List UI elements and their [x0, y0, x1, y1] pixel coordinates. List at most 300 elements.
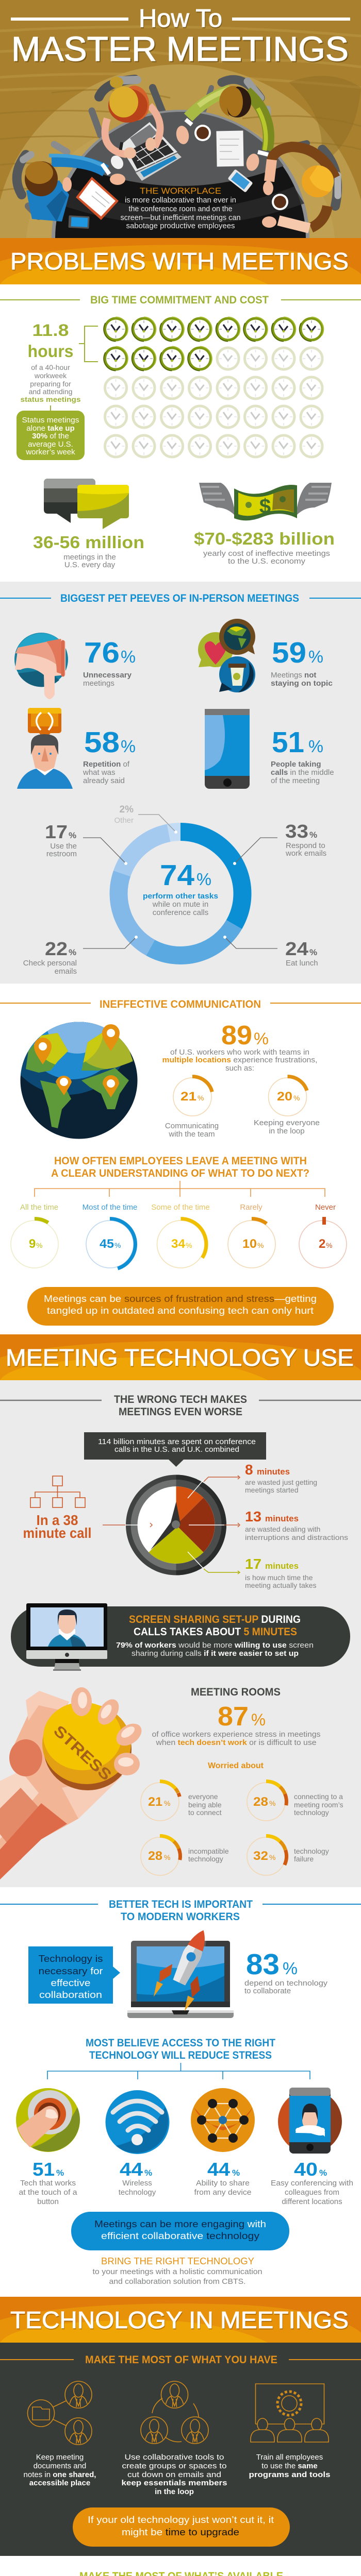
label: 33% work emails: work emails: [285, 849, 326, 858]
stat: 36-56 million meetings: [33, 533, 144, 569]
panel: screen sharing: [11, 1603, 350, 1671]
icon: chat bubbles: [44, 479, 129, 529]
label: 22% personal emails: emails: [55, 967, 77, 976]
icon: laptop with rocket: [127, 1921, 234, 2018]
label: 2% other: Other: [114, 816, 134, 825]
illustration: person in brown with orange hair: [262, 147, 335, 228]
stat: 44% share from any device: [194, 2159, 252, 2197]
ring stat: never 2%: %: [326, 1241, 332, 1249]
panel: make the most of what you have: [0, 2343, 361, 2556]
stat: 8 minutes: 8: [245, 1462, 253, 1478]
stat: 40% easy conferencing: different locations: [282, 2197, 342, 2206]
tip: shared place: accessible place: [29, 2479, 90, 2487]
stat: 11.8 hours: [21, 321, 81, 403]
stat: 58% repetition: [83, 726, 136, 785]
heading: how often employees leave: HOW OFTEN EMPLOYEES LEAVE A MEETING WITH: [54, 1155, 307, 1167]
ring stat: 32% technology failure: [237, 1827, 329, 1885]
stat: 11.8 hours: status meetings: [21, 395, 81, 403]
label: 17% restroom: [45, 821, 77, 858]
stat: 40% easy conferencing: [271, 2159, 353, 2206]
stat: 83% depend on technology: depend on technology: [244, 1979, 328, 1988]
icon: off-topic speech bubbles: [198, 619, 255, 692]
icon: training presentation: [251, 2384, 329, 2442]
screen sharing text: sharing during calls if it were easier to set up: [132, 1649, 299, 1658]
clock grid: 12 of 40 hours: [104, 317, 323, 457]
stat: 17 minutes: is how much time the: [245, 1573, 313, 1582]
ring stat: rarely 10%: 10: [242, 1237, 257, 1251]
ring stat: 21% everyone connect: %: [164, 1799, 170, 1807]
illustration: mouse: [110, 156, 124, 169]
illustration: woman in red with yellow hair: [105, 77, 160, 159]
ring stat: 32% technology failure: technology: [294, 1847, 329, 1855]
bracket connecting stat to clocks: [51, 326, 98, 411]
stat: 11.8 hours: workweek: [34, 371, 67, 380]
donut center text: 74% perform other tasks: perform other tasks: [143, 892, 218, 901]
illustration: man in blue: [25, 156, 125, 222]
stat: 51% taking calls: of the meeting: [271, 776, 320, 785]
ring stat: 28% incompatible: technology: [188, 1855, 223, 1863]
ring stat: 21% everyone connect: to connect: [188, 1808, 222, 1817]
ring stat: rarely 10%: Rarely: [240, 1203, 262, 1212]
workplace intro text: screen—but inefficient meetings can: [121, 214, 240, 222]
section heading: wrong tech: THE WRONG TECH MAKES: [114, 1394, 247, 1405]
tip: collaborative tools: keep essentials members: [122, 2479, 227, 2487]
stat: 76% unnecessary meetings: %: [121, 647, 136, 666]
callout pill: frustration and stress: tangled up in outdated and confusing tech can only hurt: [47, 1306, 314, 1316]
stat: 59% not staying on topic: %: [308, 647, 323, 666]
ring stat: 20% keeping in the loop: in the loop: [269, 1127, 305, 1136]
tip: shared place: Keep meeting: [36, 2453, 84, 2462]
stat: 76% unnecessary meetings: 76: [84, 636, 120, 669]
stat: 83% depend on technology: 83: [246, 1948, 280, 1981]
ring stat: 28% incompatible: incompatible: [188, 1847, 229, 1855]
label: in a 38 minute call: [23, 1512, 92, 1541]
workplace intro text: the conference room and on the: [129, 205, 232, 213]
text: bring the right technology: BRING THE RIGHT TECHNOLOGY: [101, 2256, 254, 2266]
section heading: better tech: [0, 1899, 361, 1923]
stat: 51% taking calls: calls in the middle: [271, 768, 334, 777]
illustration: chairs: [17, 79, 338, 216]
illustration: smartphone: [227, 169, 253, 193]
icon: monitor with person: [26, 1603, 107, 1671]
stat: 83% depend on technology: to collaborate: [244, 1987, 291, 1995]
stat: 36-56 million meetings: U.S. every day: [64, 561, 116, 569]
heading: how often employees leave: [51, 1155, 309, 1179]
icon: man with repeat speech bubble: [17, 708, 73, 789]
stat: 59% not staying on topic: [271, 636, 333, 688]
stat: 40% easy conferencing: colleagues from: [285, 2188, 339, 2197]
stat: 8 minutes: are wasted just getting: [245, 1478, 317, 1486]
callout: status meetings 30%: worker’s week: [25, 448, 75, 456]
workplace intro text: sabotage productive employees: [126, 222, 235, 230]
stat: yearly cost: $70-$283 billion: [194, 529, 335, 548]
icon: video call phone: [278, 2088, 342, 2154]
label: 17% restroom: 17: [45, 821, 68, 842]
title: Master Meetings: MASTER MEETINGS: [11, 30, 349, 69]
stat: 89% multiple locations: [162, 1021, 318, 1073]
text: bring the right technology: [93, 2256, 262, 2286]
ring stat: 21% everyone connect: [131, 1773, 222, 1831]
wood table background: [0, 0, 361, 238]
ring stat: some of the time 34%: %: [186, 1241, 192, 1249]
clock pie: 38 minute call: [126, 1475, 226, 1575]
callout pill: time to upgrade: If your old technology just won’t cut it, it: [88, 2515, 274, 2525]
callout: status meetings 30%: 30% of the: [32, 432, 69, 440]
callout: technology is necessary: effective: [51, 1978, 91, 1988]
ring stat: 21% communicating: Communicating: [165, 1122, 219, 1130]
ring stat: some of the time 34%: Some of the time: [151, 1203, 210, 1212]
stat: 44% share from any device: %: [232, 2168, 240, 2178]
stat: 87% stress: %: [251, 1710, 266, 1729]
ring stat: all the time 9%: 9: [29, 1237, 36, 1251]
heading: most believe access: TECHNOLOGY WILL REDUCE STRESS: [89, 2049, 272, 2061]
stat: 17 minutes: meeting actually takes: [245, 1581, 317, 1589]
ring stat: rarely 10%: %: [257, 1241, 264, 1249]
stat: 51% tech at touch of button: 51: [32, 2159, 55, 2180]
stat: 51% tech at touch of button: [19, 2159, 77, 2206]
illustration: laptop: [120, 122, 182, 181]
section heading: wrong tech: [0, 1394, 361, 1418]
stat: 8 minutes: minutes: [257, 1467, 290, 1477]
icon: collaboration loop: [141, 2381, 208, 2444]
banner: meeting technology use: [0, 1334, 361, 1380]
label: 24% eat lunch: %: [309, 947, 317, 957]
ring stat: 28% connecting to room: connecting to a: [294, 1792, 343, 1801]
stat: 83% depend on technology: [244, 1948, 328, 1995]
workplace intro text: is more collaborative than ever in: [125, 196, 236, 205]
stat: 11.8 hours: preparing for: [30, 380, 71, 388]
ring stat: 21% communicating: [165, 1077, 219, 1139]
illustration: clipboard: [76, 177, 119, 220]
stat: 76% unnecessary meetings: [83, 636, 136, 688]
callout pill: more engaging: [71, 2212, 289, 2250]
tip: same programs: [249, 2453, 330, 2479]
label: 22% personal emails: 22: [45, 938, 68, 959]
heading: most believe access: MOST BELIEVE ACCESS TO THE RIGHT: [86, 2037, 275, 2049]
label: 2% other: 2%: [120, 804, 134, 815]
stat: yearly cost: [194, 529, 335, 566]
donut center text: 74% perform other tasks: 74: [160, 859, 194, 892]
stat: 11.8 hours: and attending: [29, 387, 72, 396]
stat: yearly cost: yearly cost of ineffective meetings: [203, 549, 330, 558]
stat: 51% taking calls: [271, 726, 334, 785]
illustration: paper: [216, 131, 244, 166]
icon: thumbs down: [14, 633, 68, 699]
illustration: coffee cups: [194, 125, 288, 210]
stat: 8 minutes: [245, 1462, 317, 1494]
ring stat: 21% communicating: %: [198, 1094, 204, 1102]
stat: 76% unnecessary meetings: Unnecessary: [83, 671, 132, 680]
icon: shared folder: [28, 2381, 92, 2445]
stat: 89% multiple locations: 89: [221, 1021, 252, 1050]
illustration: hand squeezing stress ball: [0, 1687, 145, 1879]
callout: technology is necessary: Technology is: [38, 1954, 103, 1964]
ring stat: 32% technology failure: 32: [253, 1849, 268, 1863]
title: How To: How To: [139, 5, 222, 32]
label: 22% personal emails: [23, 938, 77, 976]
panel: pet peeves background: [0, 582, 361, 984]
stat: 13 minutes: interruptions and distractions: [245, 1533, 348, 1541]
label: 17% restroom: restroom: [46, 850, 77, 858]
section heading: wrong tech: MEETINGS EVEN WORSE: [119, 1406, 242, 1418]
callout: 114 billion minutes: [84, 1432, 266, 1467]
donut leader lines: [83, 815, 277, 948]
label: in a 38 minute call: In a 38: [36, 1512, 78, 1528]
heading: most believe access: [86, 2037, 275, 2061]
section heading: biggest pet peeves: BIGGEST PET PEEVES OF IN-PERSON MEETINGS: [60, 592, 299, 604]
ring stat: most of the time 45%: %: [114, 1241, 121, 1249]
illustration: man head and hands: [175, 86, 261, 173]
stat: 89% multiple locations: %: [254, 1029, 269, 1048]
tip: same programs: programs and tools: [249, 2470, 330, 2479]
stat: 17 minutes: [245, 1556, 317, 1589]
donut center text: 74% perform other tasks: conference calls: [153, 908, 208, 917]
tip: collaborative tools: [122, 2453, 227, 2496]
stat: 40% easy conferencing: %: [319, 2168, 327, 2178]
label: 22% personal emails: Check personal: [23, 959, 77, 968]
callout pill: more engaging: Meetings can be more engaging with: [94, 2219, 266, 2229]
stat: 17 minutes: minutes: [265, 1561, 299, 1571]
banner: problems with meetings: [0, 238, 361, 284]
screen sharing text: [116, 1641, 314, 1658]
hero header: [0, 0, 361, 238]
stat: 40% easy conferencing: Easy conferencing with: [271, 2179, 353, 2188]
stat: 87% stress: when tech doesn’t work or is difficult to use: [155, 1738, 316, 1747]
stat: 89% multiple locations: such as:: [225, 1064, 254, 1073]
ring stat: 21% communicating: with the team: [168, 1130, 215, 1139]
ring stat: 28% incompatible: %: [164, 1853, 170, 1861]
stat: 87% stress: 87: [218, 1702, 249, 1732]
stat: 51% tech at touch of button: Tech that works: [20, 2179, 76, 2188]
workplace intro text: [121, 186, 240, 230]
ring stat: 28% incompatible: [131, 1827, 229, 1885]
stat: 87% stress: [152, 1702, 321, 1747]
banner: technology in meetings: TECHNOLOGY IN MEETINGS: [10, 2307, 349, 2333]
stat: 44% wireless: technology: [119, 2188, 156, 2197]
stat: 58% repetition: Repetition of: [83, 760, 130, 769]
illustration: tablet: [68, 215, 90, 229]
donut chart: tasks on mute: [96, 809, 265, 978]
stat: 58% repetition: what was: [83, 768, 116, 777]
heading: meeting rooms: MEETING ROOMS: [191, 1686, 281, 1698]
stat: 58% repetition: %: [121, 737, 136, 756]
callout: 114 billion minutes: calls in the U.S. and U.K. combined: [114, 1445, 239, 1454]
donut center text: 74% perform other tasks: while on mute in: [152, 900, 208, 909]
section heading: MAKE THE MOST OF WHAT YOU HAVE: [85, 2354, 277, 2366]
ring stat: some of the time 34%: 34: [171, 1237, 186, 1251]
stat: 11.8 hours: 11.8: [32, 321, 69, 340]
stat: 44% wireless: %: [144, 2168, 152, 2178]
ring stat: most of the time 45%: Most of the time: [83, 1203, 137, 1212]
label: 22% personal emails: %: [69, 947, 76, 957]
stat: 59% not staying on topic: Meetings not: [271, 671, 316, 680]
screen sharing text: 79% of workers would be more willing to use screen: [116, 1641, 314, 1650]
callout pill: frustration and stress: Meetings can be sources of frustration and stress —getting: [44, 1294, 317, 1304]
label: 24% eat lunch: [285, 938, 318, 968]
stat: 76% unnecessary meetings: meetings: [83, 679, 114, 688]
ring stat: 20% keeping in the loop: Keeping everyone: [254, 1118, 320, 1127]
callout pill: time to upgrade: might be time to upgrade: [122, 2527, 239, 2537]
stat: 51% taking calls: %: [308, 737, 323, 756]
ring stat: 21% everyone connect: everyone: [188, 1792, 218, 1801]
illustration: hand squeezing stress ball: STRESS: [50, 1722, 114, 1784]
stat: 11.8 hours: hours: [28, 342, 73, 361]
illustration: man in green: [186, 89, 269, 155]
ring stat: 32% technology failure: %: [269, 1853, 275, 1861]
stat: 51% taking calls: People taking: [271, 760, 321, 769]
callout: 114 billion minutes: 114 billion minutes are spent on conference: [98, 1437, 256, 1446]
banner: meeting technology use: MEETING TECHNOLOGY USE: [6, 1344, 354, 1371]
ring stat: 21% communicating: 21: [180, 1090, 196, 1104]
stat: 44% wireless: Wireless: [122, 2179, 152, 2188]
stat: 58% repetition: already said: [83, 776, 125, 785]
icon: smartphone: [205, 709, 250, 789]
donut center text: 74% perform other tasks: %: [196, 870, 211, 889]
title: How To: [11, 9, 350, 28]
stat: 44% wireless: 44: [120, 2159, 143, 2180]
text: bring the right technology: and collaboration solution from CBTS.: [109, 2277, 245, 2286]
stat: 44% wireless: [119, 2159, 156, 2197]
illustration: meeting table: [52, 110, 309, 238]
ring stat: all the time 9%: All the time: [20, 1203, 58, 1212]
label: 33% work emails: [285, 821, 326, 858]
tree connector: [35, 1181, 325, 1197]
stat: 83% depend on technology: %: [283, 1959, 298, 1978]
stat: 59% not staying on topic: 59: [272, 636, 306, 669]
label: in a 38 minute call: minute call: [23, 1525, 92, 1541]
tip: collaborative tools: Use collaborative tools to: [125, 2453, 224, 2462]
stat: yearly cost: to the U.S. economy: [228, 557, 306, 566]
stat: 87% stress: of office workers experience stress in meetings: [152, 1730, 321, 1739]
icon: wifi: [105, 2090, 169, 2154]
ring stat: some of the time 34%: [151, 1203, 210, 1269]
stat: 58% repetition: 58: [84, 726, 120, 759]
label: 2% other: [114, 804, 134, 825]
stat: 44% share from any device: Ability to share: [196, 2179, 250, 2188]
stat: 36-56 million meetings: 36-56 million: [33, 533, 144, 552]
arrows from clock to labels: [103, 1476, 240, 1574]
ring stat: most of the time 45%: [83, 1203, 137, 1269]
stat: 11.8 hours: of a 40-hour: [31, 363, 70, 371]
icon: org chart: [30, 1476, 85, 1507]
tip: collaborative tools: in the loop: [155, 2487, 194, 2496]
text: bring the right technology: to your meetings with a holistic communication: [93, 2267, 262, 2276]
stat: 51% tech at touch of button: at the touch of a: [19, 2188, 77, 2197]
callout pill: more engaging: efficient collaborative technology: [101, 2231, 259, 2241]
callout: status meetings 30%: average U.S.: [28, 440, 73, 449]
tree connector: [47, 2063, 310, 2079]
ring stat: all the time 9%: %: [36, 1241, 42, 1249]
label: 33% work emails: %: [309, 830, 317, 840]
banner: problems with meetings: PROBLEMS WITH MEETINGS: [10, 248, 349, 275]
label: 33% work emails: Respond to: [286, 841, 325, 850]
callout: technology is necessary: [28, 1946, 120, 2004]
workplace intro text: THE WORKPLACE: [140, 186, 221, 196]
section heading: big time commitment and cost: BIG TIME COMMITMENT AND COST: [90, 294, 269, 306]
tip: shared place: notes in one shared,: [24, 2470, 96, 2479]
callout: status meetings 30%: alone take up: [26, 424, 75, 433]
ring stat: 28% connecting to room: 28: [253, 1795, 268, 1809]
section heading: better tech: BETTER TECH IS IMPORTANT: [109, 1899, 253, 1910]
label: 24% eat lunch: Eat lunch: [286, 959, 318, 968]
callout: status meetings 30%: Status meetings: [22, 416, 79, 425]
donut center text: 74% perform other tasks: [143, 859, 218, 917]
icon: button press: [16, 2088, 80, 2152]
stat: 51% tech at touch of button: button: [37, 2197, 59, 2206]
ring stat: all the time 9%: [9, 1203, 60, 1269]
stat: 17 minutes: 17: [245, 1556, 261, 1572]
tip: collaborative tools: create groups or spaces to: [122, 2462, 227, 2470]
stat: 44% share from any device: from any device: [194, 2188, 252, 2197]
screen sharing headline: [129, 1614, 301, 1638]
icon: network: [191, 2088, 255, 2152]
stat: 13 minutes: [245, 1509, 348, 1541]
ring stat: rarely 10%: [226, 1203, 277, 1269]
ring stat: 20% keeping in the loop: [254, 1077, 320, 1136]
label: 17% restroom: %: [69, 831, 76, 840]
tip: same programs: to use the same: [261, 2462, 318, 2470]
ring stat: 28% connecting to room: %: [269, 1799, 275, 1807]
stat: 44% share from any device: 44: [207, 2159, 230, 2180]
section heading: better tech: TO MODERN WORKERS: [121, 1911, 240, 1923]
tip: shared place: [24, 2453, 96, 2487]
label: 17% restroom: Use the: [50, 842, 77, 851]
ring stat: never 2%: 2: [319, 1237, 325, 1251]
stat: 89% multiple locations: multiple locations experience frustrations,: [162, 1056, 318, 1064]
tip: collaborative tools: cut down on emails and: [127, 2470, 221, 2479]
icon: flying money: [199, 483, 332, 520]
stat: 51% taking calls: 51: [272, 726, 304, 759]
ring stat: 20% keeping in the loop: 20: [277, 1090, 292, 1104]
ring stat: 20% keeping in the loop: %: [293, 1094, 300, 1102]
stat: 13 minutes: are wasted dealing with: [245, 1525, 320, 1533]
stat: 13 minutes: 13: [245, 1509, 261, 1524]
ring stat: 28% connecting to room: meeting room’s: [294, 1801, 343, 1809]
ring stat: never 2%: [299, 1203, 347, 1268]
stat: 89% multiple locations: of U.S. workers who work with teams in: [170, 1048, 309, 1057]
heading: worried about: Worried about: [208, 1761, 264, 1770]
stat: 59% not staying on topic: staying on topic: [271, 679, 333, 688]
ring stat: 21% everyone connect: being able: [188, 1801, 222, 1809]
callout: technology is necessary: necessary for: [38, 1966, 103, 1976]
ring stat: never 2%: Never: [315, 1203, 336, 1212]
stat: 40% easy conferencing: 40: [294, 2159, 318, 2180]
ring stat: 28% connecting to room: [237, 1773, 343, 1831]
section heading: ineffective communication: INEFFECTIVE COMMUNICATION: [100, 998, 261, 1010]
label: 24% eat lunch: 24: [285, 938, 308, 959]
callout pill: time to upgrade: [73, 2507, 290, 2547]
stat: 36-56 million meetings: meetings in the: [63, 553, 116, 562]
banner: technology in meetings: [0, 2297, 361, 2343]
icon: flying money: $: [259, 495, 271, 518]
heading: how often employees leave: A CLEAR UNDERSTANDING OF WHAT TO DO NEXT?: [51, 1167, 309, 1179]
stat: 13 minutes: minutes: [265, 1514, 299, 1523]
ring stat: 21% everyone connect: 21: [148, 1795, 162, 1809]
callout: status meetings 30%: [17, 411, 85, 460]
stat: 51% tech at touch of button: %: [56, 2168, 64, 2178]
screen sharing headline: SCREEN SHARING SET-UP DURING: [129, 1614, 301, 1625]
tip: same programs: Train all employees: [256, 2453, 323, 2462]
panel: wrong tech background: [0, 1380, 361, 1887]
callout: technology is necessary: collaboration: [39, 1990, 102, 2000]
screen sharing headline: CALLS TAKES ABOUT 5 MINUTES: [134, 1626, 297, 1638]
tip: shared place: documents and: [34, 2462, 86, 2470]
icon: globe with pins: [21, 1022, 137, 1139]
label: 33% work emails: 33: [285, 821, 308, 842]
ring stat: 28% incompatible: 28: [148, 1849, 162, 1863]
ring stat: 32% technology failure: failure: [294, 1855, 314, 1863]
callout pill: frustration and stress: [27, 1287, 334, 1326]
